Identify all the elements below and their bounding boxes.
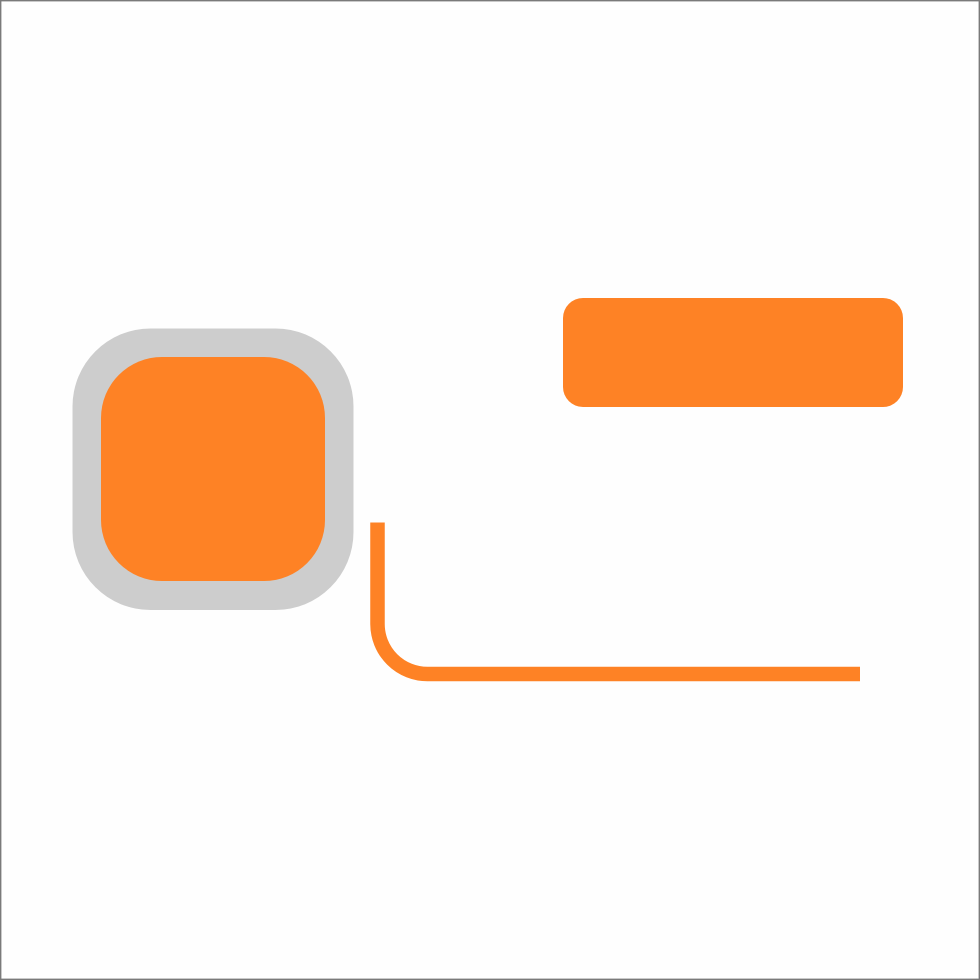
panel: orange rounded square: [101, 357, 325, 581]
panel: orange rounded rectangle: [563, 298, 903, 407]
connector: orange elbow line: [378, 522, 860, 674]
panel: grey rounded square frame: [72, 328, 354, 610]
